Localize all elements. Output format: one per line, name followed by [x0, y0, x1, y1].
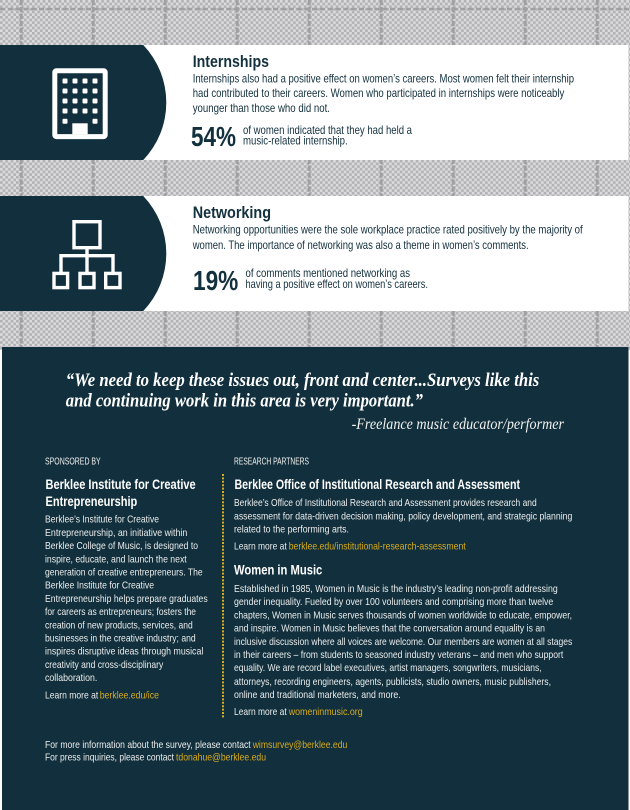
panel: internships: [0, 45, 628, 160]
sponsor description: businesses in the creative industry; and: [45, 633, 196, 645]
sponsor heading: [46, 476, 196, 509]
partner description: Women in Music: in their careers – from students to seasoned industry veterans – and men who support: [234, 649, 563, 661]
partner link: Berklee office: berklee.edu/institutional-research-assessment: [289, 541, 466, 553]
stat: 19%: 19%: [193, 265, 238, 296]
sponsor heading: Entrepreneurship: [46, 493, 137, 509]
stat caption: internships: [243, 123, 412, 148]
partner heading: Berklee office: Berklee Office of Institutional Research and Assessment: [234, 476, 520, 492]
partner link: Berklee office: [234, 541, 466, 553]
sponsor description: inspire, educate, and launch the next: [45, 553, 187, 565]
sponsor description: Berklee College of Music, is designed to: [45, 540, 198, 552]
sponsor heading: Berklee Institute for Creative: [46, 476, 196, 492]
quote: and continuing work in this area is very important.”: [66, 392, 423, 412]
partner description: Berklee office: related to the performing arts.: [234, 524, 349, 536]
sponsor description: Entrepreneurship, an initiative within: [45, 527, 187, 539]
sponsor description: Berklee Institute for Creative: [45, 580, 154, 592]
text block: networking description: [192, 223, 583, 252]
sponsor link: Learn more at: [45, 690, 98, 702]
partner heading: Women in Music: Women in Music: [234, 562, 322, 578]
white card: [140, 196, 628, 311]
contact lines: For press inquiries, please contact: [45, 752, 174, 764]
icon: network hierarchy: [54, 222, 120, 288]
quote attribution: -Freelance music educator/performer: [352, 416, 565, 433]
dark tab: [0, 45, 166, 160]
stat caption: networking: [246, 266, 428, 291]
partner link: Berklee office: Learn more at: [234, 541, 287, 553]
label: research partners: RESEARCH PARTNERS: [234, 457, 309, 468]
quote: “We need to keep these issues out, front and center...Surveys like this: [66, 371, 539, 391]
sponsor description: inspires disruptive ideas through musical: [45, 646, 203, 658]
footer background: [2, 347, 628, 810]
sponsor description: collaboration.: [45, 672, 97, 684]
stat: 54%: 54%: [191, 121, 236, 152]
contact lines: For more information about the survey, please contact: [45, 739, 251, 751]
contact lines: [45, 739, 347, 764]
white card: [140, 45, 628, 160]
sponsor description: creation of new products, services, and: [45, 619, 193, 631]
partner description: Women in Music: Established in 1985, Women in Music is the industry’s leading non-profit addressing: [234, 583, 558, 595]
sponsor link: berklee.edu/ice: [100, 690, 159, 702]
partner description: Women in Music: gender inequality. Fueled by over 100 volunteers and comprising more than twelve: [234, 596, 553, 608]
quote: [66, 371, 539, 412]
sponsor description: Entrepreneurship helps prepare graduates: [45, 593, 208, 605]
stat caption: internships: music-related internship.: [243, 134, 348, 148]
dark tab: [0, 196, 166, 311]
contact lines: tdonahue@berklee.edu: [176, 752, 266, 764]
sponsor description: Berklee’s Institute for Creative: [45, 514, 159, 526]
partner description: Women in Music: online and traditional marketers, and more.: [234, 689, 401, 701]
heading: internships: Internships: [193, 52, 269, 71]
stat caption: networking: of comments mentioned networking as: [246, 266, 410, 280]
panel: networking: [0, 196, 628, 311]
stat caption: networking: having a positive effect on women’s careers.: [246, 277, 428, 291]
partner description: Women in Music: and inspire. Women in Music believes that the conversation around equality is an: [234, 623, 545, 635]
sponsor description: [45, 514, 208, 684]
partner description: Berklee office: [234, 497, 572, 536]
patterned background: [0, 0, 630, 350]
sponsor description: generation of creative entrepreneurs. The: [45, 567, 203, 579]
icon: office building: [55, 71, 105, 137]
sponsor description: for careers as entrepreneurs; fosters the: [45, 606, 196, 618]
text block: networking description: women. The importance of networking was also a theme in women’s comments.: [192, 238, 529, 252]
text block: internships description: younger than those who did not.: [193, 101, 330, 115]
partner description: Women in Music: attorneys, recording engineers, agents, publicists, studio owners, music publishers,: [234, 676, 551, 688]
partner link: Women in Music: womeninmusic.org: [288, 706, 363, 718]
heading: networking: Networking: [193, 203, 271, 222]
text block: internships description: [193, 72, 574, 115]
contact lines: wimsurvey@berklee.edu: [252, 739, 347, 751]
partner link: Women in Music: [234, 706, 363, 718]
partner description: Women in Music: equality. We are record label executives, artist managers, songwriters, musicians,: [234, 662, 542, 674]
panel: dark footer: [2, 347, 628, 810]
partner link: Women in Music: Learn more at: [234, 706, 287, 718]
sponsor link: [45, 690, 159, 702]
partner description: Women in Music: [234, 583, 572, 701]
partner description: Berklee office: Berklee’s Office of Institutional Research and Assessment provides research and: [234, 497, 537, 509]
stat caption: internships: of women indicated that they had held a: [243, 123, 412, 137]
sponsor description: creativity and cross-disciplinary: [45, 659, 164, 671]
label: sponsored by: SPONSORED BY: [45, 457, 101, 468]
dotted divider: [222, 474, 224, 718]
